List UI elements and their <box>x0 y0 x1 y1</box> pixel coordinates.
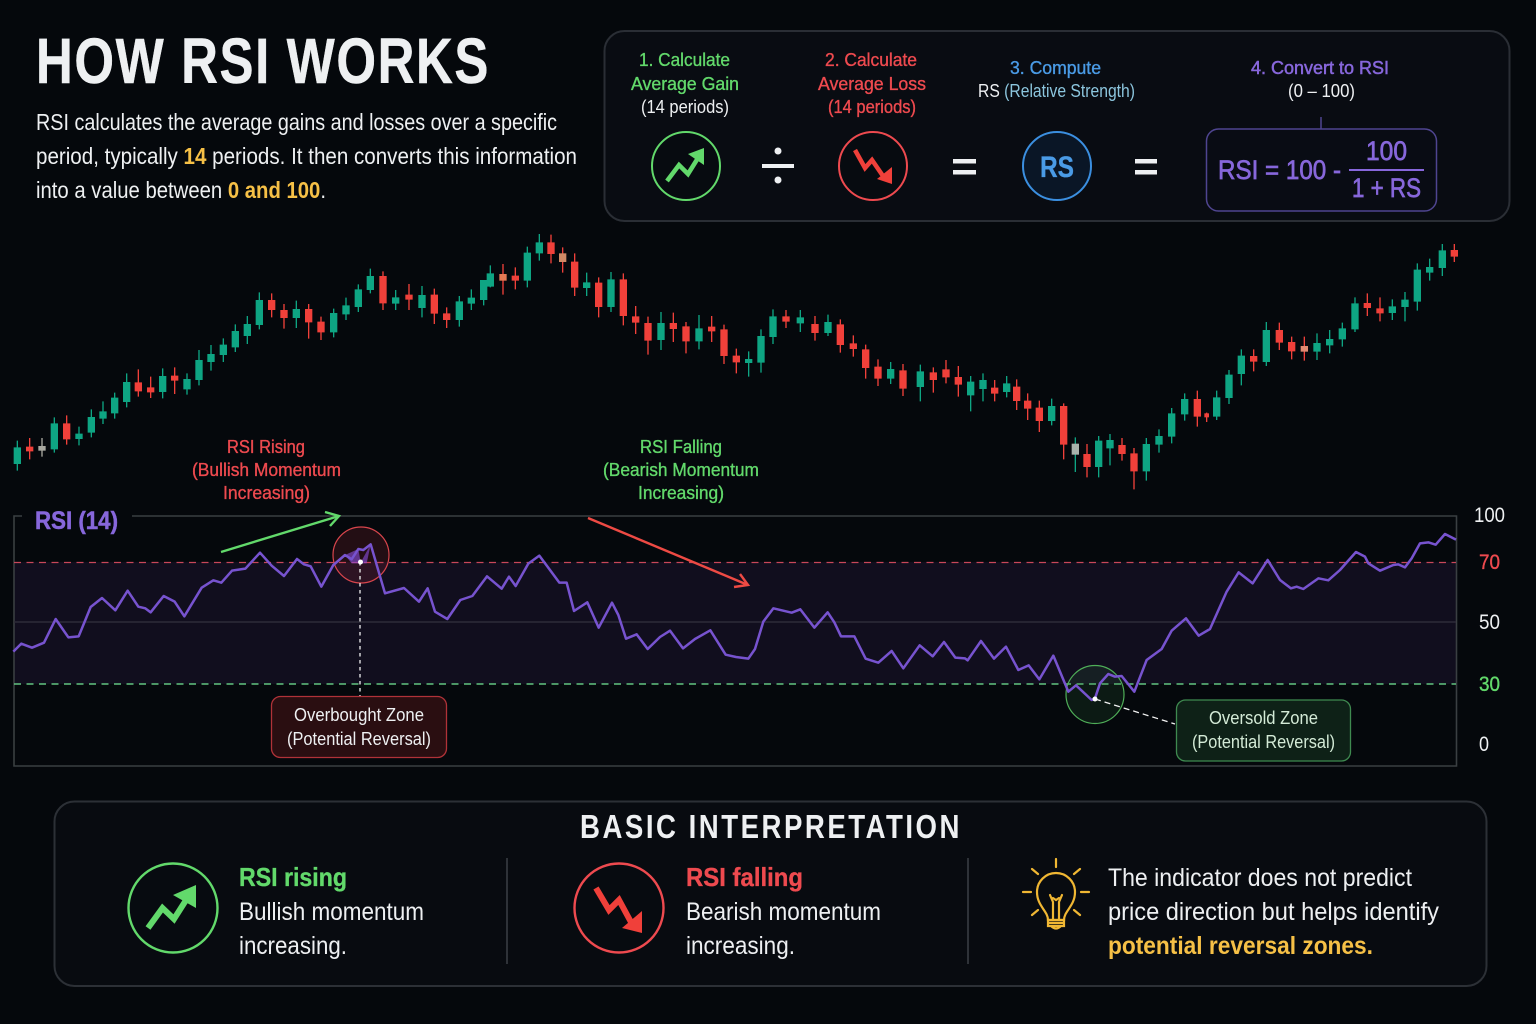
text: RSI falling: Bearish momentum <box>686 898 881 926</box>
icon: rising <box>128 864 218 952</box>
step 1 text: 1. Calculate <box>639 50 730 70</box>
callout: overbought <box>272 696 446 758</box>
step 3 text <box>978 58 1135 101</box>
RSI line <box>13 534 1456 700</box>
formula box <box>1206 117 1436 211</box>
text: RSI falling: increasing. <box>686 932 795 960</box>
intro text block: period, typically 14 periods. It then converts this information <box>36 143 577 169</box>
step 2 text <box>818 50 926 117</box>
icon: equals <box>953 159 976 174</box>
icon: average loss <box>839 132 907 200</box>
axis labels: 50 <box>1479 611 1500 634</box>
icon: RS circle: RS <box>1040 151 1074 184</box>
callout: oversold <box>1176 700 1350 761</box>
text: RSI rising: Bullish momentum <box>239 898 424 926</box>
label: RSI rising: Increasing) <box>223 483 310 503</box>
label: RSI rising <box>192 437 341 503</box>
arrow: red falling <box>588 518 748 587</box>
panel: basic interpretation <box>54 802 1486 986</box>
text: RSI rising: increasing. <box>239 932 347 960</box>
formula box: 1 + RS <box>1352 173 1421 203</box>
label: RSI falling: RSI Falling <box>640 437 722 457</box>
callout: overbought: Overbought Zone <box>294 705 424 725</box>
icon: RS circle <box>1023 132 1091 200</box>
icon: light bulb <box>1023 859 1089 928</box>
axis labels: 100 <box>1474 504 1505 527</box>
label: RSI falling: Increasing) <box>638 483 724 503</box>
candlestick chart <box>17 234 1454 489</box>
formula box: 100 <box>1366 136 1407 166</box>
label: RSI falling: (Bearish Momentum <box>603 460 759 480</box>
intro text block: into a value between 0 and 100. <box>36 177 326 203</box>
intro text block: RSI calculates the average gains and losses over a specific <box>36 109 557 135</box>
oversold circle <box>1066 666 1124 724</box>
step 2 text: (14 periods) <box>828 97 916 117</box>
step 2 text: 2. Calculate <box>825 50 917 70</box>
RSI chart panel <box>13 504 1505 766</box>
text: RSI falling: RSI falling <box>686 862 803 892</box>
icon: equals <box>1135 159 1157 174</box>
step 2 text: Average Loss <box>818 74 926 94</box>
text: RSI rising: RSI rising <box>239 862 347 892</box>
label: RSI rising: RSI Rising <box>227 437 305 457</box>
icon: average gain <box>652 132 720 200</box>
heading: BASIC INTERPRETATION <box>580 808 962 845</box>
callout: overbought: (Potential Reversal) <box>287 729 431 749</box>
text: takeaway: potential reversal zones. <box>1108 932 1373 960</box>
overbought marker <box>358 560 363 696</box>
oversold marker <box>1092 696 1175 724</box>
formula box: RSI = 100 - <box>1218 155 1341 185</box>
step 3 text: RS (Relative Strength) <box>978 81 1135 101</box>
step 4 text: (0 – 100) <box>1288 81 1355 101</box>
title: HOW RSI WORKS <box>36 25 490 97</box>
axis labels: 70 <box>1479 551 1500 574</box>
axis labels: 30 <box>1479 673 1500 696</box>
step 3 text: 3. Compute <box>1010 58 1101 78</box>
text: RSI falling <box>686 862 881 960</box>
icon: falling <box>574 864 664 952</box>
intro text block <box>36 109 577 203</box>
divider <box>506 858 508 964</box>
step 1 text: (14 periods) <box>641 97 729 117</box>
icon: divide <box>762 148 794 184</box>
label: RSI falling <box>603 437 759 503</box>
text: takeaway: price direction but helps identify <box>1108 898 1439 926</box>
arrow: green rising <box>221 512 339 552</box>
callout: oversold: (Potential Reversal) <box>1192 732 1335 752</box>
divider <box>967 858 969 964</box>
callout: oversold: Oversold Zone <box>1209 708 1318 728</box>
RSI heading: RSI (14) <box>35 507 118 535</box>
axis labels: 0 <box>1479 733 1489 756</box>
step 4 text <box>1251 58 1389 101</box>
text: takeaway <box>1108 864 1439 960</box>
overbought circle <box>333 527 389 583</box>
axis labels <box>1474 504 1505 756</box>
step 1 text: Average Gain <box>631 74 739 94</box>
panel: formula steps <box>604 31 1510 221</box>
text: RSI rising <box>239 862 424 960</box>
step 1 text <box>631 50 739 117</box>
text: takeaway: The indicator does not predict <box>1108 864 1412 892</box>
step 4 text: 4. Convert to RSI <box>1251 58 1389 78</box>
label: RSI rising: (Bullish Momentum <box>192 460 341 480</box>
